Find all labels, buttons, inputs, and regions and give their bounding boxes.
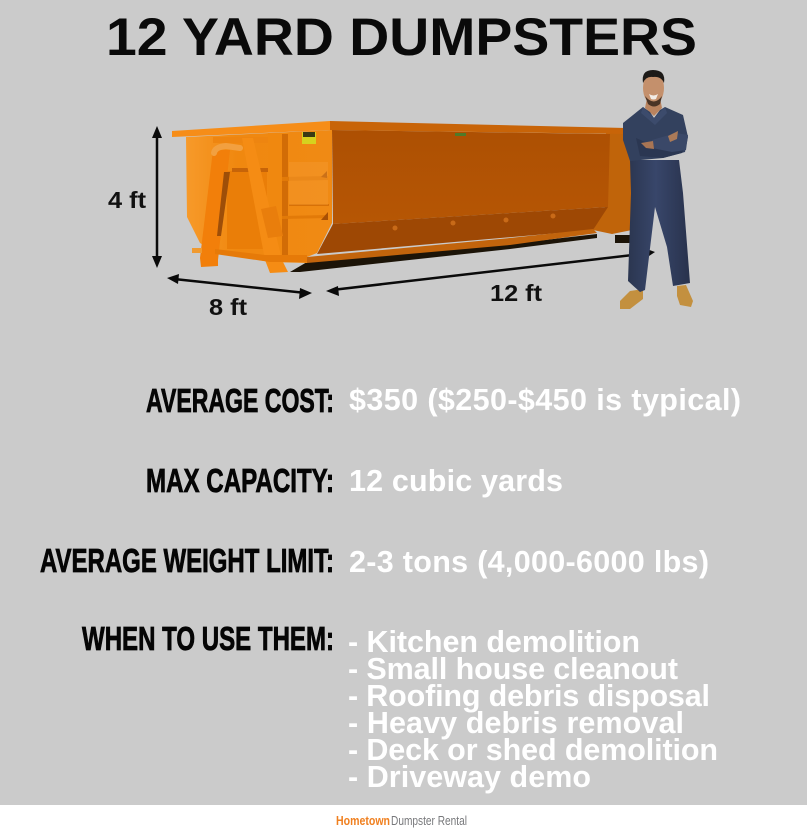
label: max capacity: MAX CAPACITY: (146, 462, 334, 499)
label: 8 ft: 8 ft (209, 294, 247, 320)
bolts (392, 226, 398, 230)
worker figure (620, 70, 693, 309)
value: weight limit: 2-3 tons (4,000-6000 lbs) (349, 545, 709, 579)
dumpster bottom rail (307, 229, 597, 263)
list: uses: - Driveway demo (348, 760, 591, 794)
arrow: width 8 ft (167, 274, 312, 299)
label: average weight limit: AVERAGE WEIGHT LIMIT: (40, 542, 334, 579)
legs (628, 160, 690, 292)
label: when to use them: WHEN TO USE THEM: (82, 620, 334, 657)
title: 12 YARD DUMPSTERS (106, 8, 697, 67)
list: uses: - Roofing debris disposal (348, 679, 710, 713)
dumpster end panel (186, 130, 332, 263)
arrow: length 12 ft (326, 248, 655, 296)
end ribs (268, 133, 288, 260)
bottom bar (215, 249, 307, 262)
list: uses: - Small house cleanout (348, 652, 678, 686)
list: uses: - Deck or shed demolition (348, 733, 718, 767)
shadow (290, 234, 597, 272)
dumpster top rim (172, 121, 330, 137)
neck (645, 98, 662, 116)
far wheel shadow (615, 235, 632, 243)
footer logo: Hometown (336, 814, 390, 828)
torso (623, 107, 688, 161)
footer logo: Dumpster Rental (391, 814, 467, 828)
arrow: height 4 ft (152, 126, 162, 268)
footer logo (336, 814, 467, 828)
hook lift arm right (242, 138, 288, 273)
label: average cost: AVERAGE COST: (146, 382, 334, 419)
collar (641, 107, 667, 125)
label: 4 ft: 4 ft (108, 187, 146, 213)
value: average cost: $350 ($250-$450 is typical) (349, 383, 741, 417)
dumpster far-end frame (593, 131, 632, 234)
beard (645, 96, 662, 106)
dumpster illustration (172, 121, 632, 273)
label: 12 ft: 12 ft (490, 280, 542, 306)
dumpster long side panel (332, 130, 610, 224)
value: max capacity: 12 cubic yards (349, 464, 563, 498)
hands (641, 141, 654, 149)
arm lines (636, 138, 685, 158)
list: uses: - Kitchen demolition (348, 625, 640, 659)
list: uses: - Heavy debris removal (348, 706, 684, 740)
head (643, 72, 664, 104)
smile (649, 94, 658, 100)
boots (620, 289, 643, 309)
hook lift arm left (200, 150, 230, 267)
list: uses (348, 625, 718, 794)
dumpster lower bevel (317, 207, 608, 254)
warning label (302, 132, 316, 144)
hair (643, 70, 664, 83)
hook (214, 146, 240, 153)
footer band (0, 805, 807, 835)
